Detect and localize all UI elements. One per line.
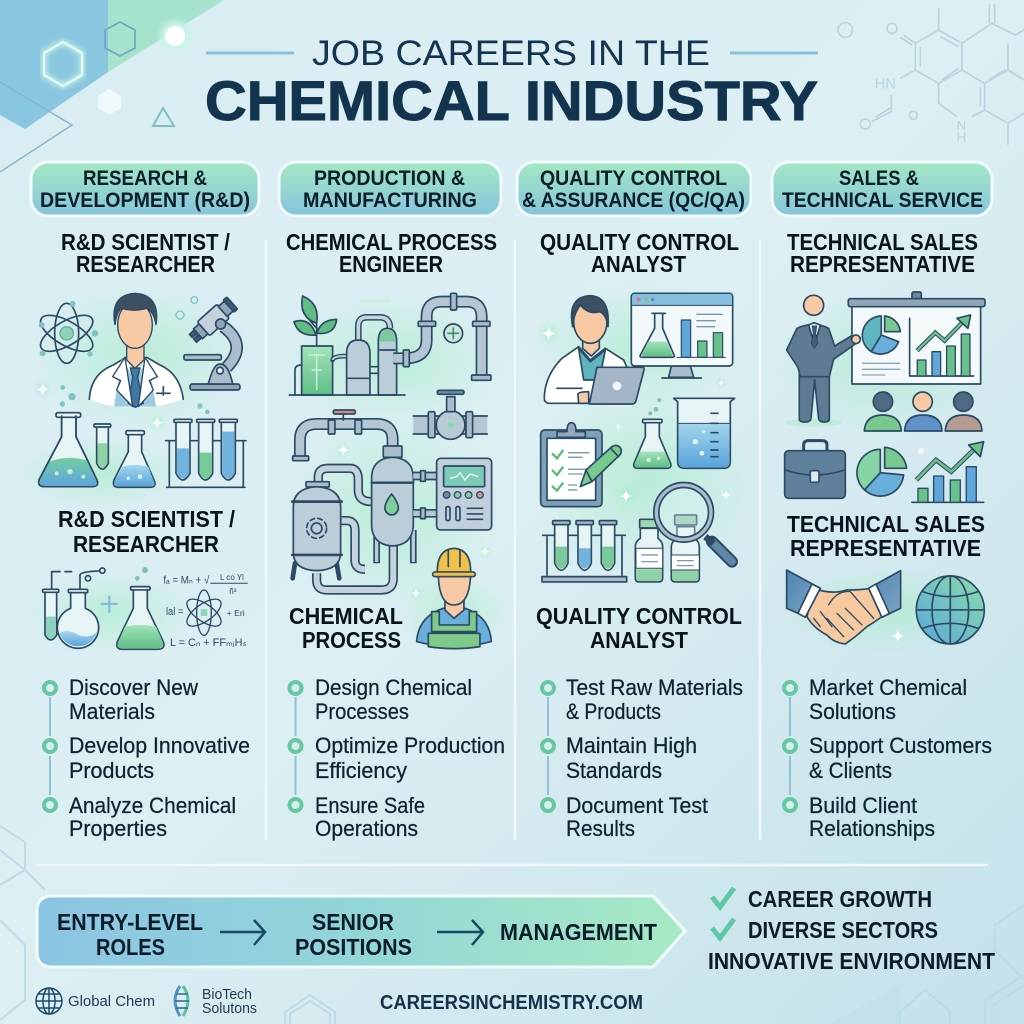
job title: Quality Control Analyst, second: QUALITY CONTROL [536, 603, 742, 629]
icon: reactor with drop [372, 446, 413, 563]
logo: BioTech Solutions: BioTech [202, 986, 252, 1003]
heading: Quality Control & Assurance [517, 162, 751, 216]
job title: Chemical Process, second: CHEMICAL [289, 603, 403, 629]
heading: Production & Manufacturing [279, 162, 501, 216]
job title: R&D Scientist: RESEARCHER [76, 251, 215, 277]
molecule watermark, top right: HN [875, 77, 896, 93]
duties list: Quality: Standards [566, 758, 662, 783]
duties list: Production [290, 675, 505, 841]
job title: Chemical Process, second: PROCESS [302, 627, 401, 653]
icon: sample bottles with magnifier [635, 485, 732, 582]
job title: Quality Control Analyst: ANALYST [591, 251, 687, 277]
duties list: Production: Processes [315, 699, 409, 724]
job title: R&D Scientist: R&D SCIENTIST / [61, 229, 230, 255]
icon: engineer in hard hat [409, 544, 492, 649]
duties list: Sales: Solutions [809, 699, 896, 724]
benefits checklist: CAREER GROWTH [748, 886, 932, 912]
job title: Quality Control Analyst: QUALITY CONTROL [540, 229, 739, 255]
heading: Research & Development [31, 162, 259, 216]
job title: R&D Scientist, second: R&D SCIENTIST / [58, 506, 235, 532]
job title: Chemical Process Engineer [286, 229, 497, 277]
duties list: R&D: Discover New [69, 675, 198, 700]
icon: check [712, 919, 734, 938]
duties list: Sales: Relationships [809, 816, 935, 841]
duties list: R&D: Products [69, 758, 154, 783]
job title: Chemical Process, second [289, 603, 403, 653]
icon: sparkles [613, 423, 732, 509]
icon: audience [864, 392, 982, 431]
formulas: L co Yl [220, 573, 244, 582]
icon: microscope [176, 296, 240, 390]
logo: BioTech Solutions: Solutons [202, 1000, 257, 1017]
career path arrow banner: POSITIONS [295, 934, 412, 960]
heading: Research & Development: RESEARCH & [83, 167, 207, 190]
benefits checklist: DIVERSE SECTORS [748, 917, 938, 943]
icon: pie chart [857, 447, 907, 496]
career path arrow banner: ROLES [96, 934, 165, 960]
job title: Technical Sales Representative [787, 229, 978, 277]
website: CAREERSINCHEMISTRY.COM [380, 992, 643, 1014]
title: CHEMICAL INDUSTRY [205, 69, 818, 132]
duties list: Quality: Document Test [566, 793, 708, 818]
icon: upper pipework [361, 293, 491, 380]
icon: upper tap pipe [293, 410, 393, 461]
heading: Sales & Technical Service: SALES & [839, 167, 919, 190]
icon: handshake [787, 570, 905, 644]
illustrations: sales [774, 290, 995, 653]
illustrations: QC lab [529, 283, 759, 582]
icon: monitor with chart [631, 293, 733, 378]
benefits checklist: INNOVATIVE ENVIRONMENT [708, 948, 995, 974]
icon: clipboard with pen [541, 423, 621, 507]
icon: atom [35, 301, 98, 363]
duties list: Quality: Test Raw Materials [566, 675, 743, 700]
icon: test tube rack [166, 403, 246, 487]
icon: briefcase [785, 441, 845, 498]
icon: control panel [413, 458, 492, 530]
icon: check [712, 888, 734, 907]
icon: test tube rack [542, 521, 627, 582]
icon: scientist [89, 293, 183, 407]
bottom background hexagons [0, 826, 1024, 1024]
illustrations: process plant [280, 293, 510, 653]
duties list: Production: Design Chemical [315, 675, 472, 700]
job title: Quality Control Analyst, second: ANALYST [590, 627, 689, 653]
duties list: Sales [784, 675, 992, 841]
duties list: Sales: Build Client [809, 793, 917, 818]
panel: Research & Development [13, 162, 259, 841]
icon: small flask [113, 431, 155, 487]
panel: Production & Manufacturing [279, 162, 510, 841]
arrow: senior to management [437, 920, 483, 945]
heading: Sales & Technical Service [772, 162, 992, 216]
benefits checklist [708, 886, 995, 974]
formulas: fₐ = Mₙ + √ [163, 574, 210, 586]
icon: connecting pipes [317, 468, 393, 590]
logo: BioTech Solutions [175, 986, 257, 1017]
duties list: Quality: Results [566, 816, 635, 841]
panel: Sales & Technical Service [772, 162, 995, 841]
title: JOB CAREERS IN THE [312, 34, 710, 73]
panel: Quality Control & Assurance [517, 162, 759, 841]
duties list: R&D: Develop Innovative [69, 733, 250, 758]
icon: beaker [674, 398, 735, 468]
job title: Chemical Process Engineer: ENGINEER [339, 251, 443, 277]
duties list: Production: Efficiency [315, 758, 407, 783]
job title: Quality Control Analyst [540, 229, 739, 277]
duties list: R&D: Materials [69, 699, 155, 724]
duties list: Sales: Support Customers [809, 733, 992, 758]
formulas: + Eri [227, 608, 245, 618]
icon: flasks with tubing [43, 567, 164, 649]
job title: Chemical Process Engineer: CHEMICAL PROCESS [286, 229, 497, 255]
title [205, 34, 818, 132]
molecule watermark, top right: N [957, 118, 966, 133]
career path arrow banner [37, 896, 685, 967]
heading: Sales & Technical Service: TECHNICAL SERVICE [782, 189, 983, 212]
duties list: Sales: & Clients [809, 758, 892, 783]
job title: Quality Control Analyst, second [536, 603, 742, 653]
column dividers [266, 240, 760, 840]
formulas: ñ³ [229, 587, 237, 596]
icon: growth chart [912, 442, 984, 502]
formulas: L = Cₙ + FFₘⱼHₛ [170, 637, 247, 649]
duties list: Quality: & Products [566, 699, 661, 724]
duties list: R&D: Analyze Chemical [69, 793, 236, 818]
duties list: R&D: Properties [69, 816, 167, 841]
logo: Global Chem [36, 988, 155, 1014]
job title: Technical Sales Representative, second: REPRESENTATIVE [790, 535, 981, 561]
formulas: lal = [166, 606, 183, 618]
icon: valve on pipe [413, 390, 487, 439]
heading: Production & Manufacturing: MANUFACTURING [303, 189, 477, 212]
duties list: Sales: Market Chemical [809, 675, 967, 700]
icon: storage vessel with gear [292, 482, 342, 578]
job title: R&D Scientist, second: RESEARCHER [73, 531, 219, 557]
top-left geometric decoration [0, 0, 224, 172]
icon: analyst at laptop [535, 296, 727, 404]
duties list: Quality: Maintain High [566, 733, 697, 758]
formulas [163, 573, 247, 649]
career path arrow banner: SENIOR [312, 909, 394, 935]
logo: Global Chem: Global Chem [68, 993, 155, 1010]
duties list: Quality [542, 675, 743, 841]
career path arrow banner: ENTRY-LEVEL [57, 909, 203, 935]
arrow: entry to senior [220, 920, 265, 945]
heading: Quality Control & Assurance: QUALITY CONTROL [540, 167, 727, 190]
icon: distillation vessels [289, 317, 405, 395]
illustrations: R&D lab [13, 283, 250, 657]
job title: R&D Scientist, second [58, 506, 235, 557]
job title: R&D Scientist [61, 229, 230, 277]
icon: flask [634, 398, 671, 468]
career path arrow banner: MANAGEMENT [500, 919, 657, 945]
job title: Technical Sales Representative, second: TECHNICAL SALES [787, 511, 985, 537]
icon: presentation board [848, 292, 985, 384]
job title: Technical Sales Representative: TECHNICAL SALES [787, 229, 978, 255]
duties list: R&D [44, 675, 250, 841]
duties list: Production: Optimize Production [315, 733, 505, 758]
icon: presenter [785, 295, 860, 427]
job title: Technical Sales Representative: REPRESENTATIVE [790, 251, 975, 277]
duties list: Production: Operations [315, 816, 418, 841]
molecule watermark, top right [838, 4, 1024, 145]
duties list: Production: Ensure Safe [315, 793, 425, 818]
icon: globe [916, 576, 984, 644]
icon: test tube [94, 424, 111, 469]
heading: Research & Development: DEVELOPMENT (R&D) [40, 189, 250, 212]
icon: conical flask with green liquid [39, 385, 98, 487]
heading: Production & Manufacturing: PRODUCTION & [314, 167, 465, 190]
icon: plant and green tank [294, 296, 337, 395]
job title: Technical Sales Representative, second [787, 511, 985, 561]
molecule watermark, top right: H [957, 129, 966, 144]
heading: Quality Control & Assurance: & ASSURANCE (QC/QA) [522, 189, 745, 212]
icon: sparkles [33, 379, 167, 433]
